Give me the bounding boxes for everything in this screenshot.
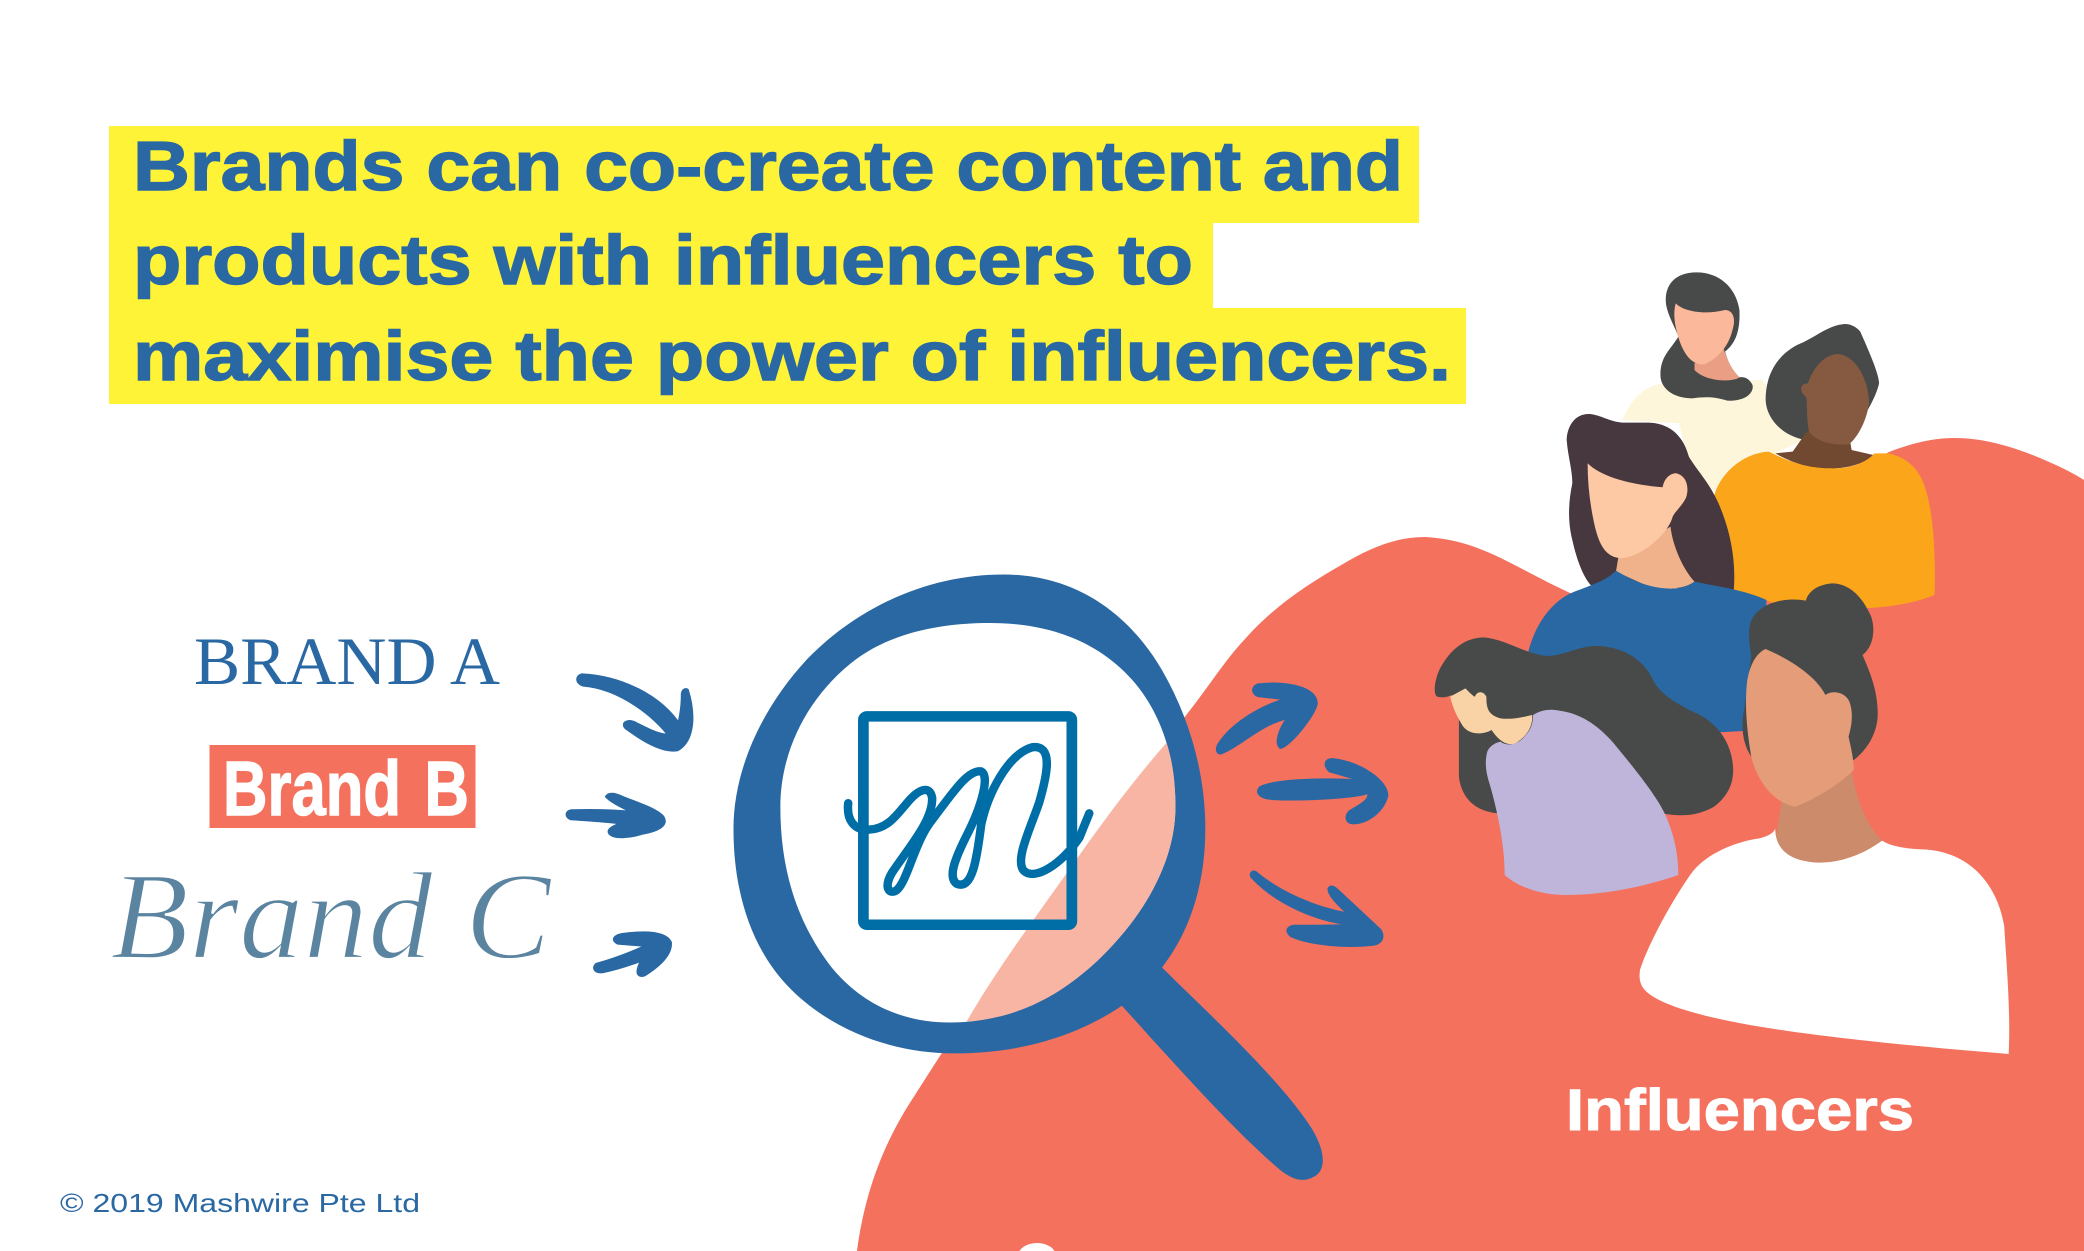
person: blue top — [1528, 414, 1766, 750]
brand B label: Brand B — [223, 745, 469, 832]
person: cream top — [1623, 272, 1804, 493]
people group: front row — [1435, 583, 2009, 1054]
magnifier frame and handle — [733, 575, 1323, 1180]
person: orange top — [1714, 324, 1935, 608]
background blob — [857, 438, 2084, 1251]
person: lilac top — [1435, 637, 1733, 895]
person: white top — [1640, 583, 2009, 1054]
arrows: magnifier to influencers — [1217, 683, 1387, 946]
brand C label: Brand C — [110, 848, 553, 986]
outgoing arrow middle — [1258, 759, 1387, 823]
lens tinted area — [967, 743, 1175, 1022]
magnifier lens — [780, 623, 1175, 1023]
arrow from brand C — [595, 933, 670, 976]
heading line 3: maximise the power of influencers. — [133, 317, 1451, 395]
brand A label: BRAND A — [194, 623, 500, 699]
heading — [109, 126, 1466, 404]
heading highlight — [109, 126, 1466, 404]
icon: script logo in square — [848, 716, 1089, 925]
influencers label: Influencers — [1566, 1078, 1914, 1143]
people group: back row — [1528, 272, 1935, 750]
magnifying glass — [733, 575, 1323, 1180]
arrow from brand A — [578, 675, 692, 750]
copyright: © 2019 Mashwire Pte Ltd — [60, 1188, 420, 1218]
arrow from brand B — [567, 794, 664, 837]
outgoing arrow bottom — [1251, 871, 1383, 946]
arrows: brands to magnifier — [567, 675, 692, 976]
outgoing arrow top — [1217, 683, 1317, 754]
heading line 2: products with influencers to — [133, 221, 1193, 299]
heading line 1: Brands can co-create content and — [133, 127, 1403, 205]
